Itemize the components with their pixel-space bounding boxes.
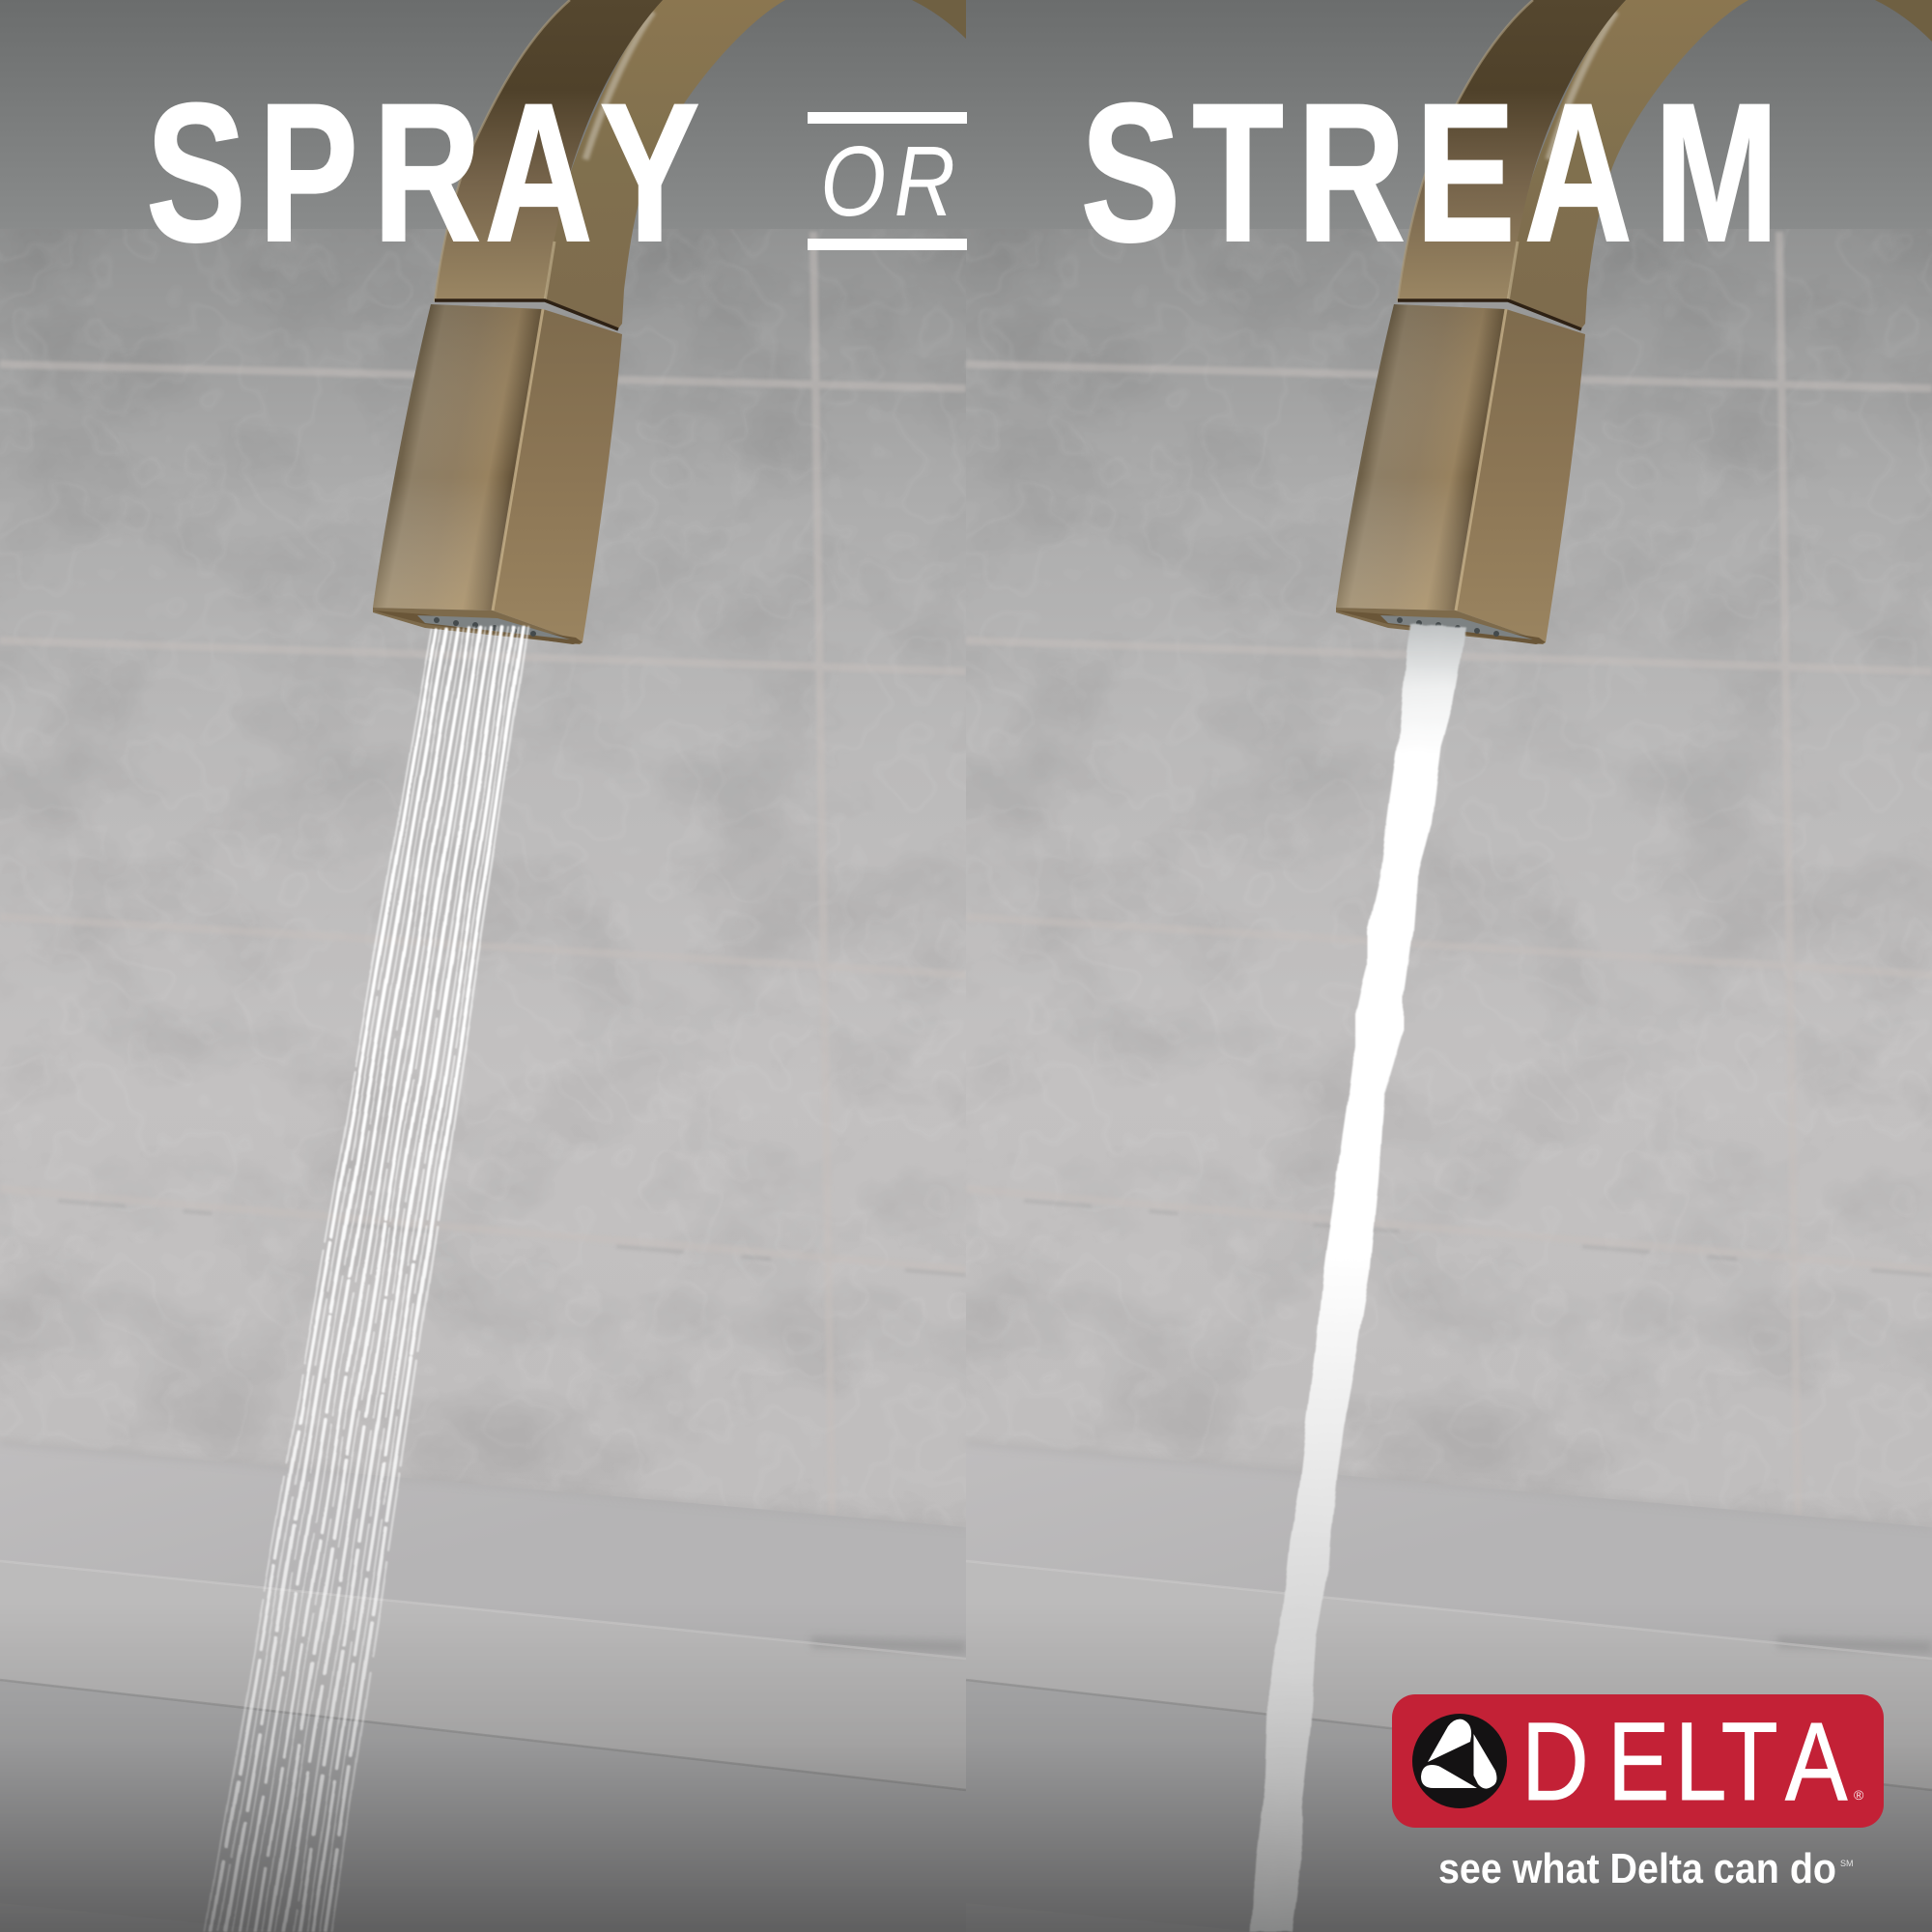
registered mark: ® xyxy=(1854,1787,1864,1803)
solid stream of water xyxy=(1251,624,1466,1932)
logo red badge xyxy=(1392,1694,1884,1828)
panel: spray xyxy=(0,0,969,1932)
spray background: tiled wall and counter xyxy=(0,0,966,1932)
icon: Delta triangle mark xyxy=(1412,1714,1507,1808)
title: SPRAY: SPRAY xyxy=(146,63,699,283)
icon: faucet stream side xyxy=(1336,0,1932,644)
divider: OR with rules xyxy=(808,112,967,250)
logo: Delta xyxy=(1392,1694,1884,1828)
divider: OR with rules: OR xyxy=(820,126,955,238)
tagline: SM xyxy=(1840,1859,1853,1868)
spray water jets xyxy=(206,628,527,1932)
stream background: tiled wall and counter xyxy=(966,0,1932,1932)
icon: faucet spray side xyxy=(373,0,969,644)
tagline: see what Delta can do xyxy=(1438,1845,1836,1892)
title: STREAM: STREAM xyxy=(1081,63,1778,283)
panel: stream xyxy=(966,0,1932,1932)
logo wordmark: DELTA xyxy=(1521,1699,1848,1824)
